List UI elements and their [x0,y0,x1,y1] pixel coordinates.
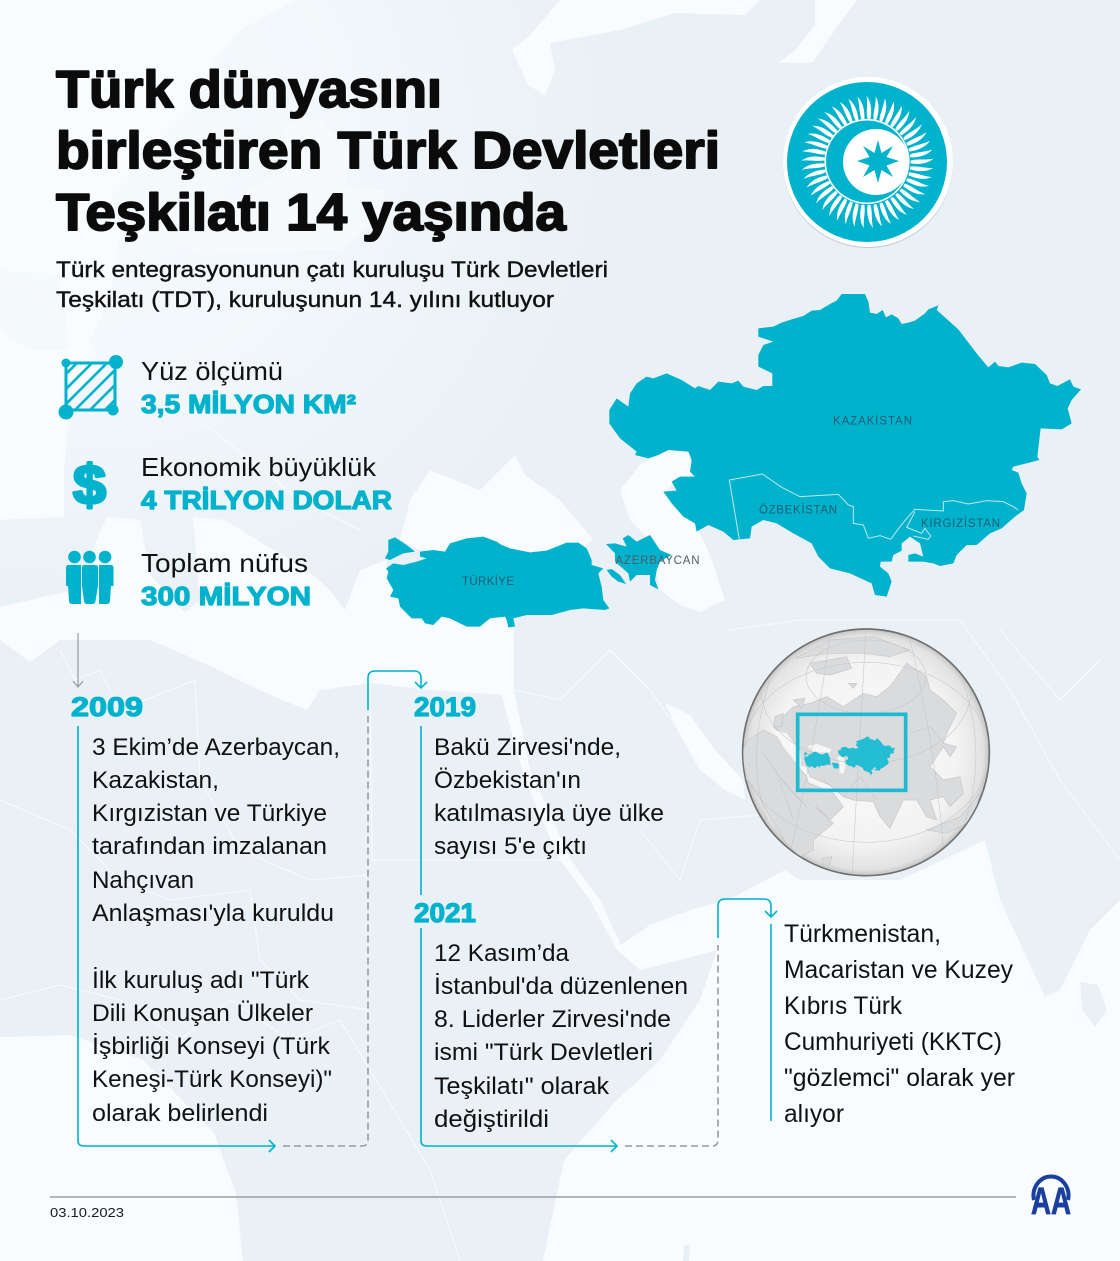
title: Teşkilatı 14 yaşında [56,184,567,242]
footer rule [50,1196,1016,1198]
panel: 2019 [414,692,664,895]
text block: Istanbul summit: 8. Liderler Zirvesi'nde [434,1006,671,1033]
map: Türkiye [385,537,609,627]
text block: Baku summit: katılmasıyla üye ülke [434,800,664,827]
map labels [462,414,1000,588]
panel: observers [771,920,1015,1128]
text block: founding: Nahçıvan [92,867,194,894]
panel: observers: Kıbrıs Türk [784,992,902,1020]
stat: surface area: Yüz ölçümü [141,356,283,386]
stat: population [66,548,311,611]
title [56,61,720,242]
logo: Anadolu Agency: AA [1031,1181,1071,1223]
connector: 2009 to 2019 [78,671,427,1152]
text block: Istanbul summit [434,940,688,1133]
text block: Baku summit [434,734,664,860]
icon: hatched square [56,354,126,420]
text block: founding: olarak belirlendi [92,1100,268,1127]
text block: founding: Kazakistan, [92,767,219,794]
panel: observers: Türkmenistan, [784,920,941,948]
subtitle [56,257,608,312]
subtitle: Teşkilatı (TDT), kuruluşunun 14. yılını kutluyor [56,287,554,312]
map: Kazakhstan, Uzbekistan, Kyrgyzstan [609,294,1081,597]
stat: surface area: 3,5 MİLYON KM² [141,389,356,419]
map labels: ÖZBEKİSTAN [759,504,837,516]
text block: founding: 3 Ekim’de Azerbaycan, [92,734,340,761]
stat: surface area [56,354,356,420]
text block: founding: İlk kuruluş adı "Türk [92,967,310,994]
map labels: KAZAKİSTAN [833,414,912,428]
title: Türk dünyasını [56,61,442,119]
panel: observers: alıyor [784,1100,844,1128]
map labels: TÜRKİYE [462,575,514,588]
stat: economy: Ekonomik büyüklük [141,452,377,482]
panel: 2009 [71,671,427,1152]
date: 03.10.2023 [50,1205,124,1220]
subtitle: Türk entegrasyonunun çatı kuruluşu Türk Devletleri [56,257,608,282]
year 2019: 2019 [414,692,476,722]
text block: Baku summit: Özbekistan'ın [434,767,581,794]
start arrow [73,633,83,687]
icon: Organization of Turkic States emblem [783,77,953,248]
icon: dollar: $ [73,453,106,516]
text block: founding: İşbirliği Konseyi (Türk [92,1033,331,1060]
stat: population: Toplam nüfus [141,548,308,578]
connector: 2021 to observers [421,899,777,1152]
icon: three people [66,551,114,604]
text block: Baku summit: sayısı 5'e çıktı [434,833,587,860]
panel: 2021 [414,898,777,1152]
year 2009: 2009 [71,692,143,722]
year 2021: 2021 [414,898,476,928]
text block: Istanbul summit: İstanbul'da düzenlenen [434,973,688,1000]
map labels: KIRGIZİSTAN [921,517,1000,530]
text block: Istanbul summit: 12 Kasım’da [434,940,570,967]
logo: Anadolu Agency [1031,1176,1071,1223]
map: Azerbaijan [606,535,672,589]
globe locator map [737,617,989,876]
panel: observers: Macaristan ve Kuzey [784,956,1013,984]
text block: founding [92,734,340,1127]
text block: founding: Anlaşması'yla kuruldu [92,900,334,927]
panel: observers: Cumhuriyeti (KKTC) [784,1028,1002,1056]
panel: observers: "gözlemci" olarak yer [784,1064,1015,1092]
text block: founding: Dili Konuşan Ülkeler [92,1000,313,1027]
stat: population: 300 MİLYON [141,581,311,611]
text block: Istanbul summit: Teşkilatı" olarak [434,1073,610,1100]
text block: founding: Keneşi-Türk Konseyi)" [92,1066,332,1093]
text block: founding: tarafından imzalanan [92,833,327,860]
text block: Istanbul summit: ismi "Türk Devletleri [434,1039,653,1066]
map labels: AZERBAYCAN [616,555,700,567]
text block: founding: Kırgızistan ve Türkiye [92,800,327,827]
stat: economy [73,452,392,516]
title: birleştiren Türk Devletleri [56,122,720,180]
text block: Istanbul summit: değiştirildi [434,1106,549,1133]
stat: economy: 4 TRİLYON DOLAR [141,485,392,515]
text block: Baku summit: Bakü Zirvesi'nde, [434,734,621,761]
